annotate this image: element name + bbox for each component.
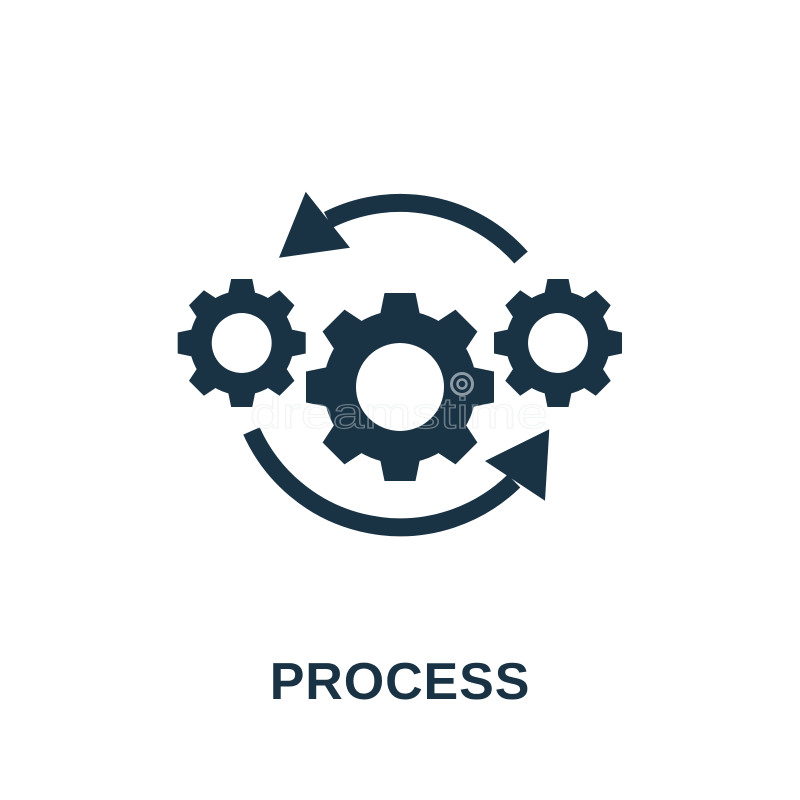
icon: left small gear (178, 279, 306, 407)
watermark: dreamstime (250, 389, 548, 438)
icon: right small gear (494, 279, 622, 407)
icon: bottom circular arrow (252, 429, 549, 527)
watermark (250, 374, 548, 438)
title: PROCESS (270, 653, 530, 711)
icon: top circular arrow (279, 192, 521, 258)
icon: large centre gear (306, 293, 494, 481)
